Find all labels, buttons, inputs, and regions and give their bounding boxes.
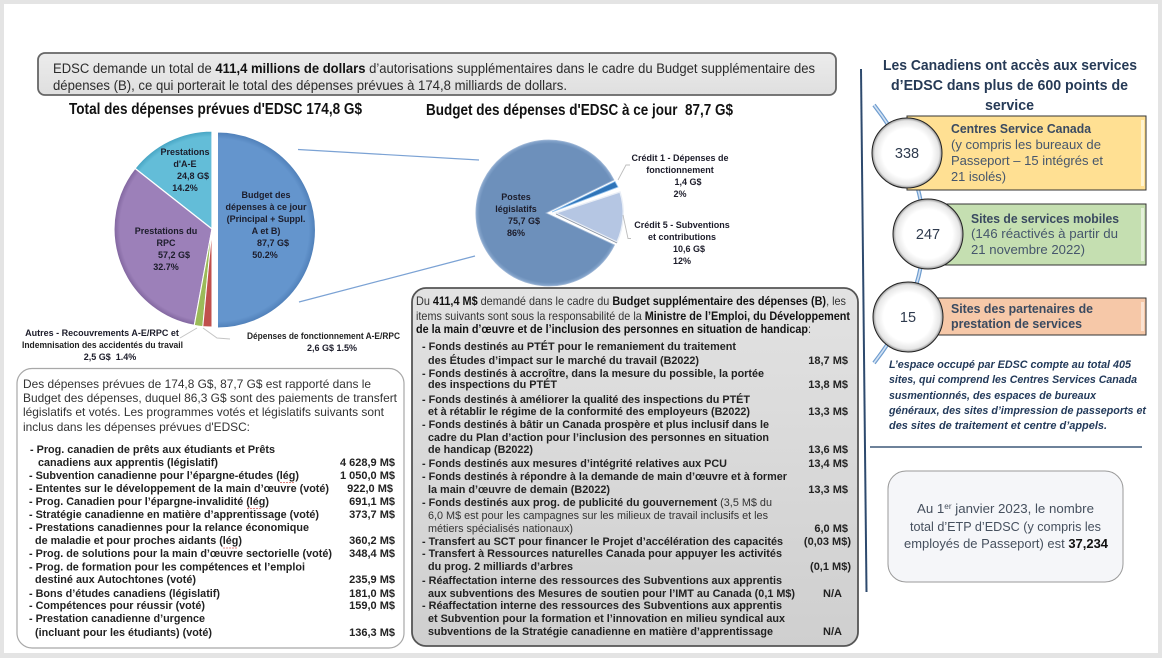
- pie label: operating: 2,6 G$ 1.5%: [307, 343, 357, 353]
- heading: service points: d’EDSC dans plus de 600 points de: [891, 77, 1128, 94]
- intro paragraph: inclus dans les dépenses prévues d'EDSC:: [23, 420, 250, 434]
- service item: partner sites: prestation de services: [951, 316, 1082, 331]
- funding list: 13,4 M$: [808, 458, 848, 470]
- program list: - Prog. de solutions pour la main d’œuvre sectorielle (voté): [29, 548, 332, 560]
- slice: statutory: [476, 140, 614, 286]
- service item: mobile service sites: 21 novembre 2022): [971, 242, 1085, 257]
- pie label: vote 1: [631, 153, 729, 199]
- summary banner: dépenses (B), ce qui porterait le total des dépenses prévues à 174,8 milliards de dollars.: [53, 78, 567, 93]
- heading: service points: Les Canadiens ont accès aux services: [883, 57, 1137, 74]
- funding list: N/A: [823, 588, 842, 600]
- service item: partner sites: [873, 282, 1146, 352]
- pie label: estimates to date: 50.2%: [252, 250, 278, 260]
- pie label: EI benefits: 14.2%: [172, 183, 198, 193]
- pie label: CPP benefits: 57,2 G$: [158, 250, 190, 260]
- heading: estimates to date: Budget des dépenses d'EDSC à ce jour 87,7 G$: [426, 102, 733, 119]
- panel: supplementary estimates items: [412, 288, 858, 646]
- slice: EI benefits: [135, 131, 212, 229]
- intro paragraph: de la main d’œuvre et de l’inclusion des personnes en situation de handicap:: [416, 322, 811, 336]
- program list: - Prestations canadiennes pour la relance économique: [29, 522, 309, 534]
- leader lines: small slices: [180, 328, 230, 339]
- callout: FTE total: er: [944, 502, 952, 511]
- slice: CPP benefits: [114, 168, 212, 325]
- pie label: CPP benefits: RPC: [156, 238, 176, 248]
- funding list: - Fonds destinés à améliorer la qualité des inspections du PTÉT: [422, 393, 750, 406]
- service item: Service Canada Centres: 338: [895, 146, 919, 162]
- note: occupied space: susmentionnés, des espaces de bureaux: [889, 390, 1097, 402]
- pie label: CPP benefits: [135, 226, 197, 272]
- service item: Service Canada Centres: Centres Service Canada: [951, 121, 1092, 136]
- pie label: other: Indemnisation des accidentés du travail: [22, 340, 183, 350]
- funding list: des Études d’impact sur le marché du travail (B2022): [428, 354, 699, 367]
- pie label: vote 5: Crédit 5 - Subventions: [634, 220, 730, 230]
- heading: service points: service: [985, 97, 1034, 114]
- funding list: - Transfert au SCT pour financer le Projet d’accélération des capacités: [422, 536, 783, 548]
- note: occupied space: sites, qui comprend les Centres Services Canada: [889, 374, 1137, 386]
- pie chart: total planned spending: [114, 131, 315, 328]
- program list: 360,2 M$: [349, 535, 395, 547]
- pie label: operating: Dépenses de fonctionnement A-E/RPC: [247, 331, 400, 341]
- summary banner: [38, 53, 836, 95]
- pie label: statutory: Postes: [501, 192, 531, 202]
- program list: destiné aux Autochtones (voté): [35, 574, 196, 586]
- note: occupied space: L’espace occupé par EDSC compte au total 405: [889, 359, 1132, 371]
- program list: - Prog. de formation pour les compétences et l’emploi: [29, 562, 305, 574]
- pie label: other: Autres - Recouvrements A-E/RPC et: [25, 328, 179, 338]
- pie label: statutory: 75,7 G$: [508, 216, 540, 226]
- funding list: et Subvention pour la formation et l’innovation en milieu syndical aux: [428, 613, 786, 625]
- callout: FTE total: Au 1: [917, 501, 944, 516]
- program list: 1 050,0 M$: [340, 470, 395, 482]
- panel: planned spending programs: [17, 368, 404, 648]
- service item: Service Canada Centres: 21 isolés): [951, 169, 1006, 184]
- callout: FTE total: total d’ETP d’EDSC (y compris les: [910, 519, 1101, 534]
- funding list: - Fonds destinés à bâtir un Canada prospère et plus inclusif dans le: [422, 419, 769, 431]
- service item: Service Canada Centres: Passeport – 15 intégrés et: [951, 153, 1103, 168]
- program list: 136,3 M$: [349, 627, 395, 639]
- funding list: cadre du Plan d’action pour l’inclusion des personnes en situation: [428, 432, 769, 444]
- program list: 159,0 M$: [349, 600, 395, 612]
- service item: Service Canada Centres: [872, 116, 1146, 190]
- funding list: 13,8 M$: [808, 379, 848, 391]
- intro paragraph: items suivants sont sous la responsabilité de la Ministre de l’Emploi, du Développement: [416, 309, 850, 323]
- funding list: métiers spécialisés nationaux): [428, 523, 573, 535]
- program list: 691,1 M$: [349, 496, 395, 508]
- pie label: other: [22, 328, 183, 362]
- funding list: 6,0 M$: [814, 523, 848, 535]
- service item: mobile service sites: (146 réactivés à partir du: [971, 226, 1118, 241]
- program list: 4 628,9 M$: [340, 457, 395, 469]
- program list: 348,4 M$: [349, 548, 395, 560]
- pie label: statutory: législatifs: [495, 204, 537, 214]
- program list: 373,7 M$: [349, 509, 395, 521]
- intro paragraph: [23, 377, 398, 434]
- slice: vote 5: [556, 192, 623, 242]
- funding list: du prog. 2 milliards d’arbres: [428, 561, 573, 573]
- pie label: vote 1: 2%: [673, 189, 687, 199]
- pie label: estimates to date: A et B): [252, 226, 280, 236]
- funding list: - Fonds destinés à répondre à la demande de main d’œuvre et à former: [422, 471, 788, 483]
- note: occupied space: des sites de traitement et centre d’appels.: [889, 420, 1107, 432]
- slice: vote 1: [552, 182, 618, 212]
- arc connecting service points: [874, 105, 924, 363]
- pie label: vote 5: et contributions: [648, 232, 716, 242]
- pie label: estimates to date: (Principal + Suppl.: [227, 214, 305, 224]
- summary banner: EDSC demande un total de 411,4 millions de dollars d’autorisations supplémentaires dans le cadre du Budget supplémentaire des: [53, 61, 815, 76]
- pie chart: estimates to date: [476, 140, 623, 286]
- funding list: des inspections du PTÉT: [428, 378, 557, 391]
- pie label: EI benefits: d'A-E: [173, 159, 197, 169]
- service item: mobile service sites: Sites de services mobiles: [971, 211, 1119, 226]
- pie label: vote 5: 10,6 G$: [673, 244, 705, 254]
- pie label: CPP benefits: Prestations du: [135, 226, 197, 236]
- service item: partner sites: Sites des partenaires de: [951, 301, 1093, 316]
- pie label: CPP benefits: 32.7%: [153, 262, 179, 272]
- program list: - Ententes sur le développement de la main d’œuvre (voté): [29, 483, 329, 495]
- funding list: aux subventions des Mesures de soutien pour l’IMT au Canada (0,1 M$): [428, 588, 795, 600]
- service item: mobile service sites: 247: [916, 227, 940, 243]
- funding list: 13,3 M$: [808, 484, 848, 496]
- pie label: other: 2,5 G$ 1.4%: [84, 352, 136, 362]
- pie label: estimates to date: 87,7 G$: [257, 238, 289, 248]
- slice: estimates to date: [218, 132, 315, 328]
- slice: other: [194, 229, 212, 327]
- funding list: - Fonds destinés à accroître, dans la mesure du possible, la portée: [422, 368, 764, 380]
- funding list: (0,1 M$): [810, 561, 851, 573]
- program list: - Subvention canadienne pour l’épargne-études (lég): [29, 470, 299, 482]
- program list: canadiens aux apprentis (législatif): [38, 457, 218, 469]
- program list: 235,9 M$: [349, 574, 395, 586]
- slice: EI/CPP operating: [203, 229, 212, 327]
- pie label: estimates to date: dépenses à ce jour: [225, 202, 307, 212]
- service item: mobile service sites: [893, 199, 1146, 269]
- funding list: - Réaffectation interne des ressources des Subventions aux apprentis: [422, 600, 782, 612]
- funding list: subventions de la Stratégie canadienne en matière d’apprentissage: [428, 626, 773, 638]
- funding list: la main d’œuvre de demain (B2022): [428, 484, 610, 496]
- funding list: - Fonds destinés aux prog. de publicité du gouvernement (3,5 M$ du: [422, 497, 772, 509]
- funding list: et à rétablir le régime de la conformité des employeurs (B2022): [428, 406, 750, 418]
- heading: service points: [883, 57, 1137, 114]
- pie label: vote 5: 12%: [673, 256, 691, 266]
- intro paragraph: [416, 294, 850, 336]
- program list: 181,0 M$: [349, 588, 395, 600]
- funding list: - Fonds destinés aux mesures d’intégrité relatives aux PCU: [422, 458, 727, 470]
- callout: FTE total: janvier 2023, le nombre: [952, 501, 1094, 516]
- leader lines: vote slices: [618, 165, 631, 238]
- pie label: estimates to date: [225, 190, 307, 260]
- funding list: - Réaffectation interne des ressources des Subventions aux apprentis: [422, 575, 782, 587]
- program list: [29, 444, 395, 639]
- pie label: EI benefits: Prestations: [160, 147, 210, 157]
- service item: partner sites: 15: [900, 310, 916, 326]
- heading: total planned spending: Total des dépenses prévues d'EDSC 174,8 G$: [69, 101, 362, 118]
- funding list: N/A: [823, 626, 842, 638]
- pie label: EI benefits: [160, 147, 210, 193]
- pie label: vote 1: fonctionnement: [646, 165, 714, 175]
- program list: - Prog. canadien de prêts aux étudiants et Prêts: [30, 444, 275, 456]
- pie label: estimates to date: Budget des: [241, 190, 291, 200]
- program list: - Prog. Canadien pour l’épargne-invalidité (lég): [29, 496, 269, 508]
- pie label: operating: [247, 331, 400, 353]
- program list: (incluant pour les étudiants) (voté): [35, 627, 212, 639]
- funding list: 13,6 M$: [808, 444, 848, 456]
- pie label: EI benefits: 24,8 G$: [177, 171, 209, 181]
- funding list: (0,03 M$): [804, 536, 851, 548]
- callout: FTE total: [888, 471, 1123, 582]
- note: occupied space: [888, 359, 1147, 432]
- connector lines between pies: [298, 150, 479, 302]
- funding list: 18,7 M$: [808, 355, 848, 367]
- pie label: vote 1: Crédit 1 - Dépenses de: [631, 153, 729, 163]
- pie label: vote 1: 1,4 G$: [674, 177, 702, 187]
- program list: de maladie et pour proches aidants (lég): [35, 535, 242, 547]
- funding list: - Fonds destinés au PTÉT pour le remaniement du traitement: [422, 340, 736, 353]
- program list: 922,0 M$: [347, 483, 393, 495]
- vertical divider: [861, 69, 866, 592]
- intro paragraph: Des dépenses prévues de 174,8 G$, 87,7 G$ est rapporté dans le: [23, 377, 371, 391]
- funding list: - Transfert à Ressources naturelles Canada pour appuyer les activités: [422, 548, 782, 560]
- funding list: 6,0 M$ est pour les campagnes sur les milieux de travail inclusifs et les: [428, 510, 768, 522]
- service item: Service Canada Centres: (y compris les bureaux de: [951, 137, 1101, 152]
- program list: - Bons d’études canadiens (législatif): [29, 588, 220, 600]
- pie label: vote 5: [634, 220, 730, 266]
- intro paragraph: législatifs et votés. Les programmes votés et législatifs suivants sont: [23, 405, 385, 419]
- intro paragraph: Du 411,4 M$ demandé dans le cadre du Budget supplémentaire des dépenses (B), les: [416, 294, 846, 308]
- program list: - Prestation canadienne d’urgence: [29, 613, 205, 625]
- program list: - Stratégie canadienne en matière d’apprentissage (voté): [29, 509, 319, 521]
- pie label: statutory: [495, 192, 540, 238]
- callout: FTE total: employés de Passeport) est 37,234: [904, 536, 1109, 551]
- note: occupied space: généraux, des sites d’impression de passeports et: [888, 405, 1147, 417]
- intro paragraph: Budget des dépenses, duquel 86,3 G$ sont des paiements de transfert: [23, 391, 398, 405]
- program list: - Compétences pour réussir (voté): [29, 600, 205, 612]
- funding list: [422, 340, 851, 638]
- funding list: de handicap (B2022): [428, 444, 533, 456]
- pie label: statutory: 86%: [507, 228, 525, 238]
- funding list: 13,3 M$: [808, 406, 848, 418]
